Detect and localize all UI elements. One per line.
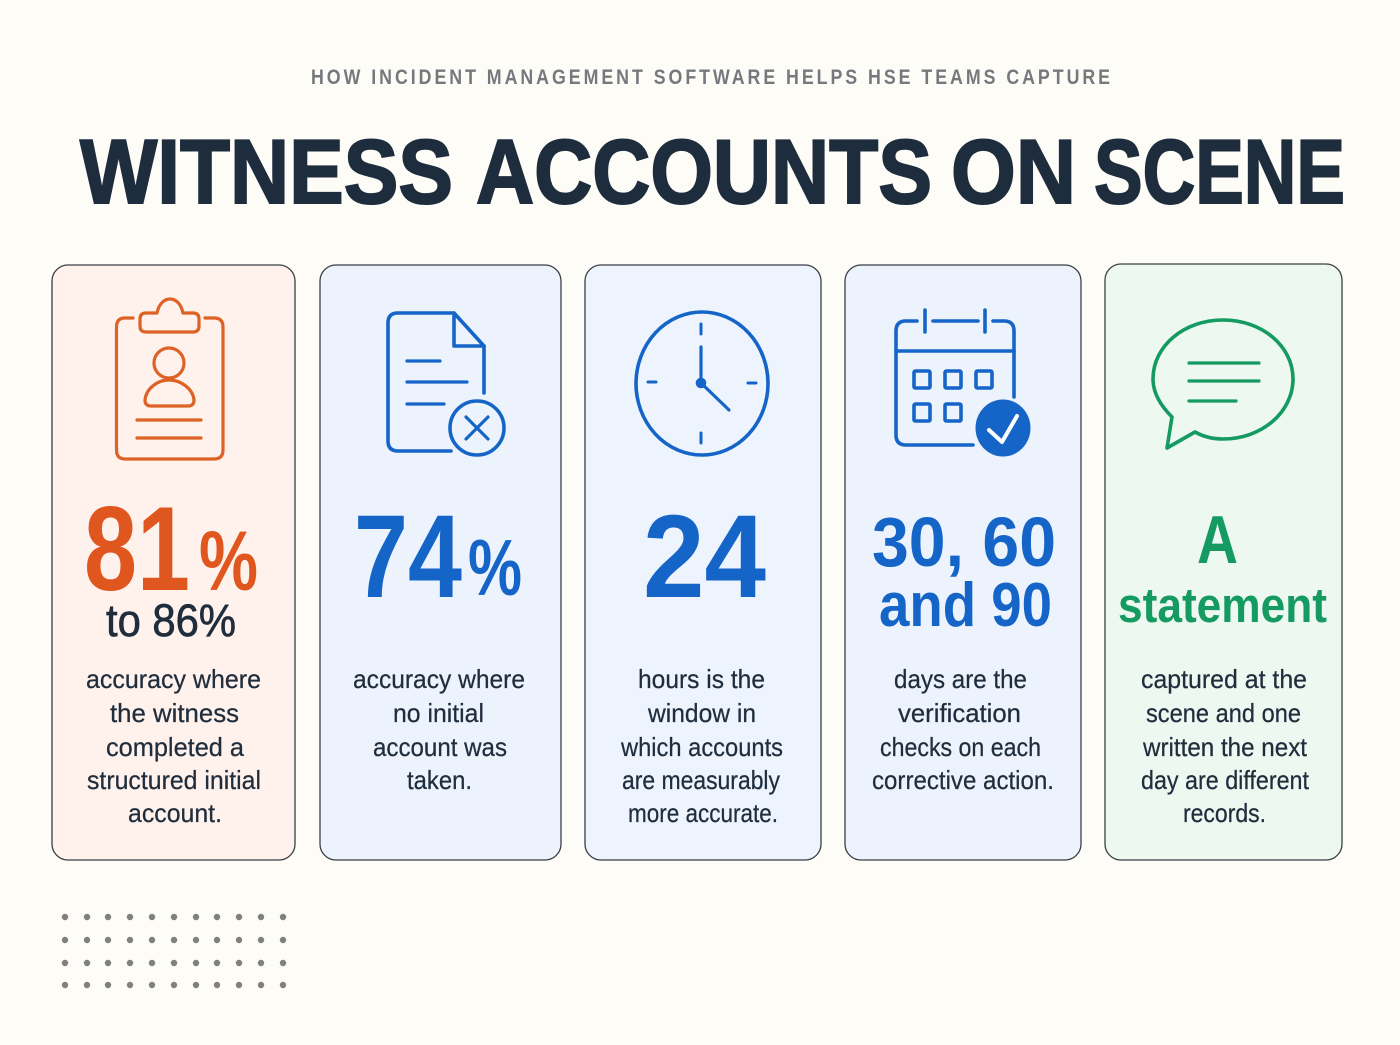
- title: ACCOUNTS: [476, 122, 932, 223]
- description: the witness: [110, 698, 239, 728]
- description: window in: [647, 698, 756, 728]
- stat: 30, 60 and 90: 30, 60: [872, 503, 1056, 581]
- stat: 24: 24: [643, 491, 766, 623]
- description: which accounts: [620, 732, 783, 762]
- description: account was: [373, 732, 507, 762]
- description: days are the: [894, 664, 1027, 694]
- icon: clock: [636, 312, 768, 455]
- description: account.: [128, 798, 222, 828]
- description: day are different: [1141, 765, 1310, 795]
- description: corrective action.: [872, 765, 1054, 795]
- description: [620, 664, 783, 828]
- description: scene and one: [1146, 698, 1301, 728]
- description: accuracy where: [86, 664, 261, 694]
- description: hours is the: [638, 664, 765, 694]
- eyebrow heading: HOW INCIDENT MANAGEMENT SOFTWARE HELPS HSE TEAMS CAPTURE: [311, 66, 1113, 89]
- description: verification: [898, 698, 1021, 728]
- description: checks on each: [880, 732, 1041, 762]
- stat: A: A: [1197, 502, 1238, 578]
- icon: calendar with check: [896, 310, 1030, 456]
- description: captured at the: [1141, 664, 1307, 694]
- stat: 81%: %: [199, 514, 258, 608]
- panel: 24 hours: [585, 265, 821, 860]
- stat: 30, 60 and 90: and 90: [879, 571, 1052, 640]
- decorative dot grid: [62, 914, 286, 988]
- description: [1141, 664, 1310, 828]
- title: [80, 122, 1345, 223]
- panel: 81 to 86 percent accuracy: [52, 265, 295, 860]
- icon: speech bubble: [1153, 320, 1293, 448]
- panel: 74 percent accuracy: [320, 265, 561, 860]
- stat: 30, 60 and 90: [872, 503, 1056, 640]
- stat: statement: statement: [1118, 579, 1327, 633]
- icon: document with cross: [388, 313, 504, 455]
- description: accuracy where: [353, 664, 525, 694]
- stat: 74%: 74: [354, 491, 462, 623]
- description: are measurably: [622, 765, 780, 795]
- stat: 74%: %: [468, 523, 522, 612]
- description: [872, 664, 1054, 795]
- description: completed a: [106, 732, 245, 762]
- description: written the next: [1142, 732, 1308, 762]
- title: SCENE: [1094, 122, 1345, 223]
- description: no initial: [393, 698, 484, 728]
- description: records.: [1183, 798, 1266, 828]
- description: [86, 664, 261, 828]
- stat: 81%: 81: [84, 482, 190, 616]
- description: structured initial: [87, 765, 261, 795]
- panel: 30, 60 and 90 days: [845, 265, 1081, 860]
- description: taken.: [407, 765, 472, 795]
- description: more accurate.: [628, 798, 778, 828]
- stat: to 86%: to 86%: [106, 595, 236, 646]
- description: [353, 664, 525, 795]
- icon: clipboard with person: [116, 299, 223, 459]
- panel: a statement: [1105, 264, 1342, 860]
- title: ON: [951, 122, 1076, 223]
- title: WITNESS: [80, 122, 453, 223]
